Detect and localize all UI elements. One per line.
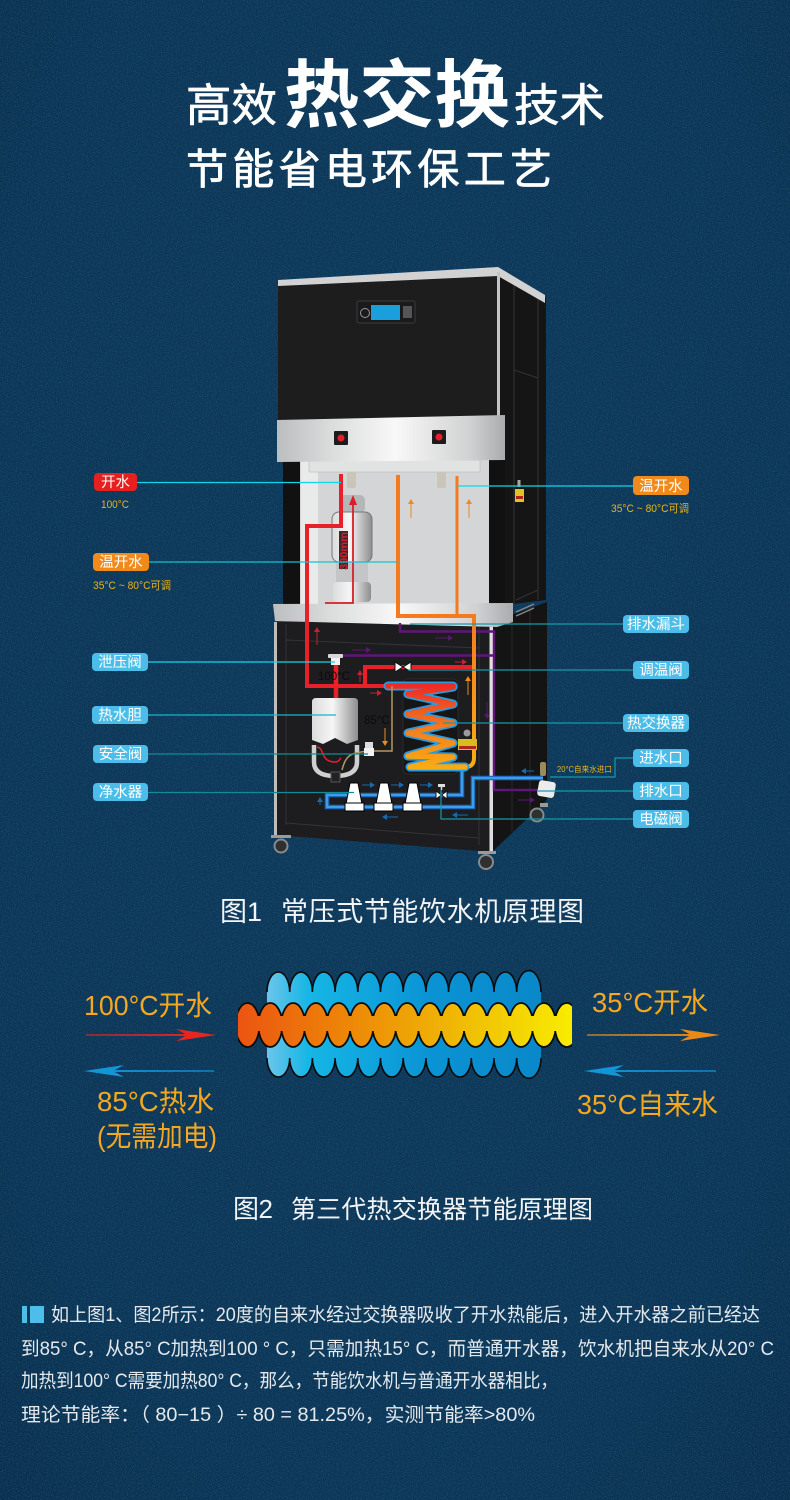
figure 2 caption: 第三代热交换器节能原理图 <box>291 1196 593 1224</box>
title line 1 <box>186 54 605 137</box>
safety valve <box>364 742 374 756</box>
note: inlet temperature: 20°C自来水进口 <box>557 764 612 774</box>
right label: drain outlet <box>633 782 689 800</box>
flow arrows <box>317 500 534 817</box>
label: 100C boiled water: 100°C开水 <box>84 990 212 1021</box>
lower cabinet front <box>275 622 492 852</box>
orange warm water pipes <box>398 475 474 767</box>
red hot water pipes <box>307 474 473 686</box>
text line 3: 加热到100° C需要加热80° C，那么，节能饮水机与普通开水器相比， <box>21 1370 558 1392</box>
inlet and outlet fittings <box>537 762 556 798</box>
solenoid valve <box>436 784 447 799</box>
warm switch <box>432 430 446 444</box>
water dispenser machine <box>271 267 556 869</box>
exchanger gauge <box>458 730 477 750</box>
right label: temperature valve <box>633 661 689 679</box>
temperature valve <box>395 662 411 672</box>
outer blue cold water channel <box>267 971 541 1078</box>
heat exchanger diagram <box>236 971 579 1078</box>
purple drain pipes <box>342 623 538 790</box>
right label: inlet <box>633 749 689 767</box>
icon: bullet bars <box>22 1306 44 1323</box>
title <box>186 54 605 193</box>
label: 35C boiled water: 35°C开水 <box>592 987 708 1018</box>
left label: relief valve <box>92 653 148 671</box>
arrow: blue right <box>584 1065 716 1077</box>
right label: temperature valve: 调温阀 <box>639 662 683 679</box>
arrow: red <box>86 1029 216 1041</box>
top trim <box>278 267 545 303</box>
thermos <box>332 495 372 602</box>
left label: boiling water: 开水 <box>101 474 130 491</box>
text line 1: 如上图1、图2所示：20度的自来水经过交换器吸收了开水热能后，进入开水器之前已经达 <box>51 1304 760 1326</box>
right label: drain funnel: 排水漏斗 <box>627 616 685 633</box>
left label: warm water: 温开水 <box>99 554 143 571</box>
arrow: orange <box>587 1029 720 1041</box>
title line 2: 节能省电环保工艺 <box>186 146 552 193</box>
hot water tank <box>312 686 392 782</box>
figure 1 caption: 图1 <box>220 897 262 927</box>
left label: hot water tank <box>92 706 148 724</box>
counter top <box>273 603 513 627</box>
upper cabinet front <box>278 275 497 420</box>
label: no electricity needed: (无需加电) <box>97 1121 217 1152</box>
left label: purifier: 净水器 <box>99 784 143 801</box>
title line 1: 高效 <box>186 80 277 131</box>
inner orange hot water channel <box>236 1003 579 1047</box>
casters <box>271 803 548 869</box>
title line 1: 技术 <box>514 80 605 131</box>
right label: drain outlet: 排水口 <box>639 783 683 800</box>
pressure relief valve <box>328 654 343 665</box>
thermos: 390mm <box>338 532 350 570</box>
description text block <box>21 1304 774 1426</box>
100 degree label: 100°C <box>318 671 350 683</box>
figure 2 caption: 图2 <box>233 1194 273 1224</box>
left label: boiling water <box>94 473 137 491</box>
blue water pipes <box>327 770 543 807</box>
note: adjustable temperature right: 35°C ~ 80°C可调 <box>611 502 689 515</box>
right label: inlet: 进水口 <box>639 750 683 767</box>
control display panel <box>357 301 415 323</box>
hot switch <box>334 431 348 445</box>
title line 1: 热交换 <box>284 54 510 137</box>
water purifier filters <box>345 783 422 811</box>
faucets <box>347 472 446 488</box>
left label: warm water <box>93 553 149 571</box>
right label: warm water <box>633 476 689 495</box>
left label: relief valve: 泄压阀 <box>98 654 142 671</box>
right label: heat exchanger: 热交换器 <box>627 714 685 732</box>
label: 85C hot water: 85°C热水 <box>97 1086 214 1117</box>
label: 35C tap water: 35°C自来水 <box>577 1089 718 1120</box>
right label: solenoid valve <box>633 810 689 828</box>
left label: hot water tank: 热水胆 <box>98 707 142 724</box>
arrow: blue left <box>84 1065 214 1077</box>
text line 2: 到85° C，从85° C加热到100 ° C，只需加热15° C，而普通开水器，饮水机把自来水从20° C <box>21 1338 774 1360</box>
right label: warm water: 温开水 <box>639 478 683 495</box>
figure 1 caption: 常压式节能饮水机原理图 <box>281 897 584 927</box>
heat exchanger coil <box>388 686 465 767</box>
dispensing recess <box>283 460 505 606</box>
leader lines <box>137 482 633 819</box>
heat exchanger housing <box>403 679 458 774</box>
steel band <box>277 415 505 462</box>
upper cabinet side <box>497 272 546 606</box>
note: 100 degrees: 100°C <box>101 499 129 511</box>
text line 4: 理论节能率：（ 80−15 ）÷ 80 = 81.25%，实测节能率>80% <box>21 1404 535 1426</box>
right label: solenoid valve: 电磁阀 <box>639 811 683 828</box>
left label: safety valve: 安全阀 <box>99 745 142 763</box>
yellow side label <box>515 480 524 502</box>
note: adjustable temperature left: 35°C ~ 80°C可调 <box>93 579 171 592</box>
85 degree label: 85°C <box>364 715 390 727</box>
lower cabinet side <box>492 602 547 852</box>
